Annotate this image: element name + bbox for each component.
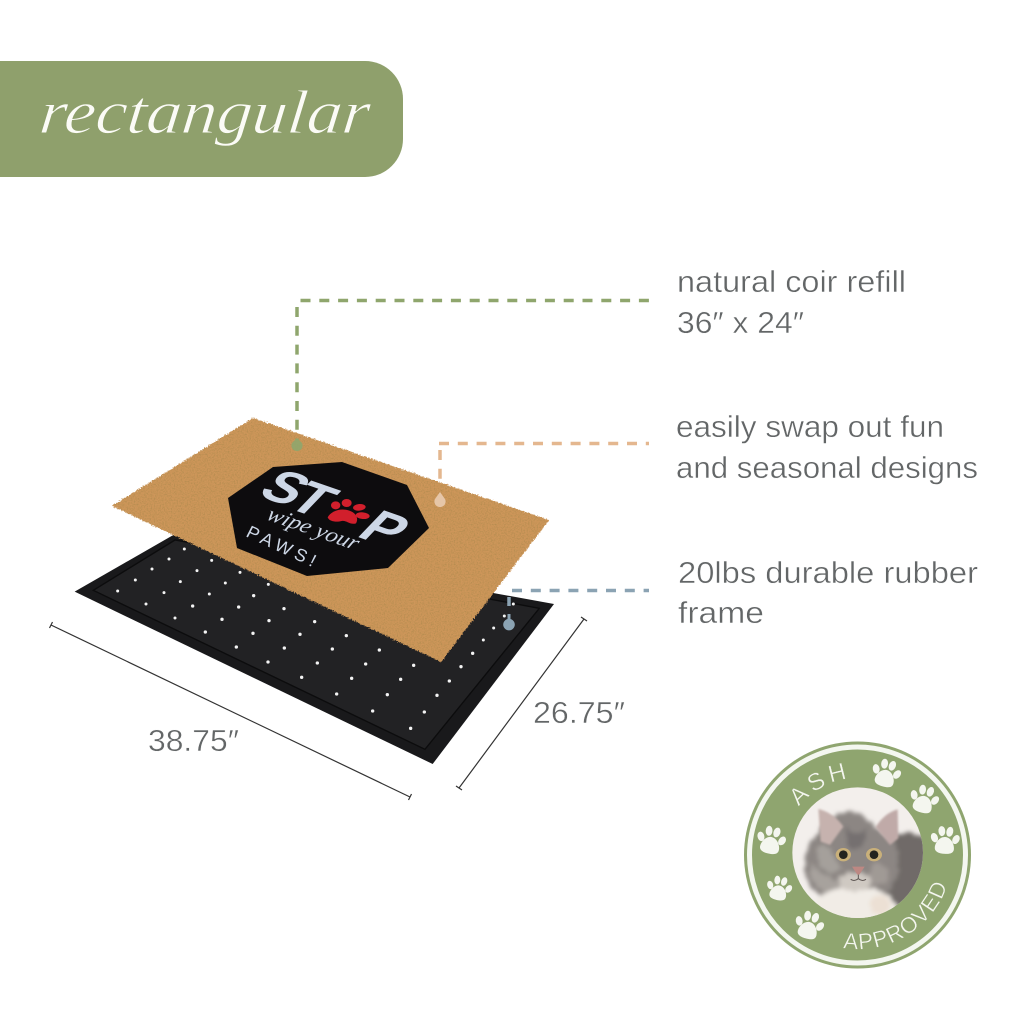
rubber frame body	[75, 535, 554, 764]
dimension: width	[50, 622, 412, 800]
product: rubber frame	[75, 535, 554, 764]
dimension: depth	[456, 617, 625, 790]
paw in stop sign	[328, 499, 370, 524]
depth label: 26.75″	[533, 695, 625, 730]
label: 36 x 24: 36″ x 24″	[677, 305, 804, 340]
badge: Ash approved	[744, 742, 971, 968]
banner title: rectangular	[37, 79, 375, 147]
green dashed line	[297, 300, 649, 440]
cat photo	[792, 787, 923, 918]
product: coir refill mat	[112, 418, 549, 662]
orange marker	[434, 492, 446, 507]
badge ASH text: ASH	[792, 763, 846, 806]
label: 20lbs durable rubber: 20lbs durable rubber	[678, 555, 978, 590]
photo backdrop	[792, 787, 923, 918]
badge outer green	[744, 742, 971, 968]
drainage dots	[116, 547, 515, 730]
wipe your: wipe your	[262, 503, 365, 555]
leader: rubber frame	[503, 590, 649, 630]
paw icons	[753, 755, 962, 942]
leader: coir refill	[291, 300, 649, 451]
depth line	[456, 617, 587, 790]
label: easily swap out fun: easily swap out fun	[676, 409, 944, 444]
paws text: PAWS!	[243, 522, 324, 572]
banner background	[0, 61, 403, 177]
badge APPROVED text: APPROVED	[843, 882, 945, 950]
blue dashed line	[512, 589, 649, 592]
rubber frame raised rim	[93, 540, 539, 749]
label: natural coir refill: natural coir refill	[677, 264, 906, 299]
cat fur	[801, 808, 923, 918]
stop sign octagon	[228, 462, 429, 576]
width label: 38.75″	[148, 723, 239, 758]
coir mat surface	[112, 418, 549, 662]
leader: swap designs	[434, 444, 649, 507]
blue marker	[503, 614, 515, 630]
label: frame: frame	[678, 595, 764, 630]
width line	[50, 622, 412, 800]
orange dashed line	[439, 444, 649, 485]
stop text: P: P	[347, 501, 422, 556]
banner: rectangular	[0, 61, 403, 177]
blue drop line	[507, 597, 511, 606]
green marker	[291, 438, 303, 451]
badge white ring	[750, 747, 966, 963]
cat photo clip	[792, 787, 923, 918]
label: and seasonal designs: and seasonal designs	[676, 450, 978, 485]
stop text: T: T	[277, 472, 349, 526]
stop text: S: S	[248, 460, 323, 515]
